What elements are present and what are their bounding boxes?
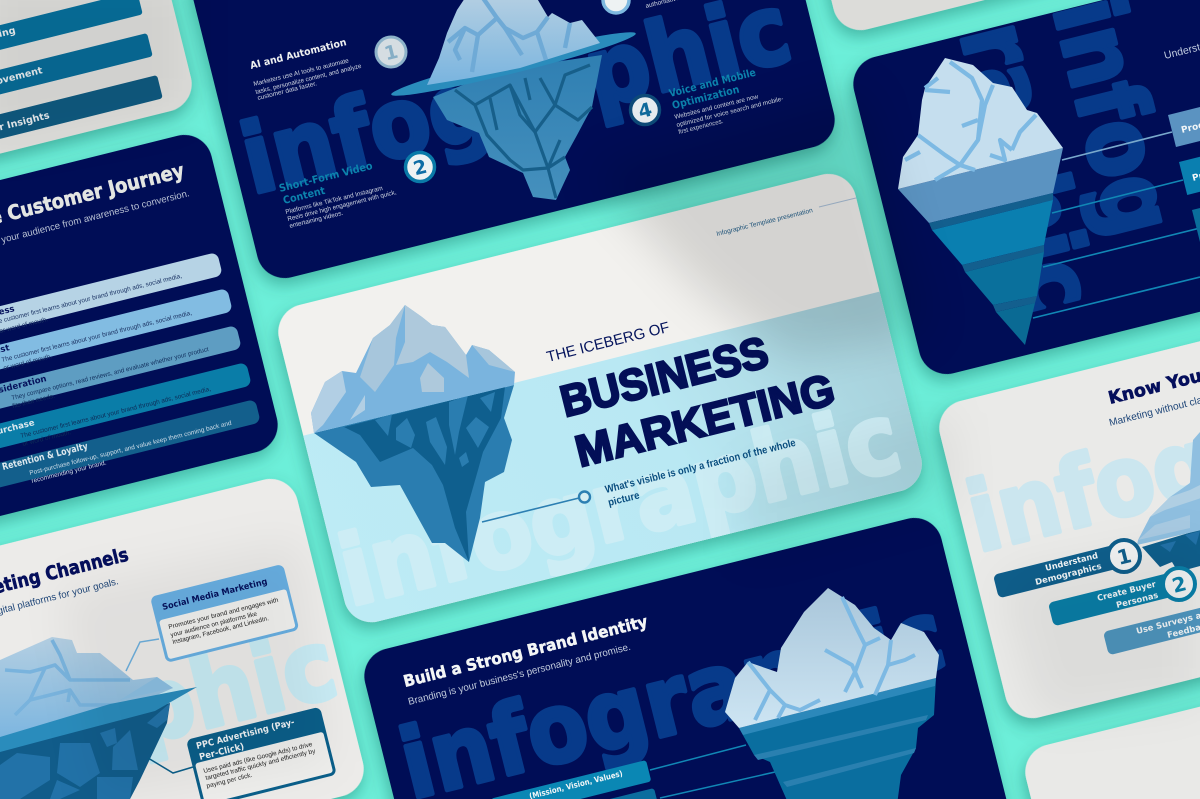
iceberg illustration xyxy=(725,588,939,799)
step pill: understand demographics: Understand xyxy=(1044,550,1099,573)
number badge 3 xyxy=(603,0,629,13)
panel: central title slide xyxy=(250,168,950,650)
panel: blank slide bottom right xyxy=(1019,608,1200,799)
journey bars xyxy=(0,254,260,488)
tagline xyxy=(604,437,797,509)
iceberg visible tip xyxy=(311,305,515,433)
callout: social media marketing: Social Media Marketing xyxy=(161,577,269,613)
item: voice and mobile optimization: Voice and Mobile xyxy=(668,67,757,100)
number badge 1 xyxy=(376,37,406,67)
number badge 2: 2 xyxy=(411,156,429,180)
iceberg illustration xyxy=(311,305,515,562)
item: AI and automation: Marketers use AI tools to automate xyxy=(253,57,350,88)
iceberg illustration xyxy=(0,637,197,799)
panel: know your audience slide xyxy=(933,264,1200,724)
step pill: create buyer personas: Create Buyer xyxy=(1096,579,1158,603)
number badge 4: 4 xyxy=(636,99,654,123)
item: voice and mobile optimization: Optimization xyxy=(671,84,741,112)
journey text: interest: The customer first learns about your brand through ads, social media, xyxy=(1,310,193,364)
item: short-form video xyxy=(278,160,397,230)
panel: customer journey slide xyxy=(0,134,284,531)
journey text: retention and loyalty: Post-purchase follow-up, support, and value keep them coming back and xyxy=(29,420,233,477)
label bar: second xyxy=(499,788,659,799)
item: voice and mobile optimization: first experiences. xyxy=(678,118,724,136)
callout: social media marketing xyxy=(126,564,299,671)
journey text: consideration: They compare options, read reviews, and evaluate whether your product xyxy=(11,346,210,402)
item: voice and mobile optimization: Websites and content are now xyxy=(674,93,759,121)
callout: social media marketing: Promotes your brand and engages with xyxy=(168,597,280,631)
callout: social media marketing: your audience on platforms like xyxy=(170,611,258,639)
heading: build a strong brand identity: Build a Strong Brand Identity xyxy=(401,612,650,691)
step pill: understand demographics: Demographics xyxy=(1034,561,1102,587)
number badge 2 xyxy=(406,152,434,182)
watermark: infographic: infographic xyxy=(328,381,911,628)
subtitle: the iceberg of: THE ICEBERG OF xyxy=(545,319,671,366)
item: AI and automation xyxy=(249,37,363,102)
iceberg underwater mass xyxy=(314,385,514,562)
step pill: create buyer personas: 2 xyxy=(1169,571,1189,598)
callout: social media marketing: Instagram, Facebook, and LinkedIn. xyxy=(172,615,270,646)
small caption: infographic template presentation xyxy=(716,197,860,238)
pointer line with dot xyxy=(482,492,590,522)
journey text: consideration: fits their needs. xyxy=(12,393,56,410)
item: short-form video: Short-Form Video xyxy=(278,160,374,195)
title: business marketing: MARKETING xyxy=(571,365,840,477)
panel: marketing channels slide xyxy=(0,473,370,799)
iceberg illustration xyxy=(389,0,638,200)
panel: digital trends slide top centre xyxy=(185,0,841,284)
label box: place xyxy=(1192,191,1200,242)
connector lines xyxy=(1033,132,1200,318)
layered iceberg xyxy=(898,58,1063,345)
item: voice and mobile optimization: optimized for voice search and mobile- xyxy=(676,96,784,129)
panel: brand identity slide xyxy=(358,512,1014,799)
small caption: infographic template presentation: Infographic Template presentation xyxy=(716,207,814,238)
callout: ppc advertising: paying per click. xyxy=(206,772,253,790)
callout: ppc advertising: PPC Advertising (Pay- xyxy=(195,718,296,752)
connector lines xyxy=(650,745,775,798)
panel: grey slide top right xyxy=(761,0,1200,36)
step pill: understand demographics xyxy=(993,540,1140,598)
item: AI and automation: AI and Automation xyxy=(249,37,348,72)
item: short-form video: Content xyxy=(282,185,326,207)
callout: ppc advertising xyxy=(148,707,337,799)
journey text: purchase: or word of mouth. xyxy=(22,429,72,448)
watermark: vertical infographic xyxy=(938,0,1197,322)
label box: product xyxy=(1168,96,1200,147)
water background xyxy=(304,292,922,622)
tagline: picture xyxy=(607,489,641,509)
step pill: create buyer personas: Personas xyxy=(1115,590,1159,610)
item: short-form video: Platforms like TikTok and Instagram xyxy=(285,185,384,216)
iceberg illustration xyxy=(1137,430,1200,572)
tagline: What's visible is only a fraction of the whole xyxy=(604,437,797,496)
title: business marketing: BUSINESS xyxy=(556,328,773,427)
number badge 1: 1 xyxy=(382,41,400,65)
panel: understand slide right xyxy=(847,0,1200,380)
step pill: understand demographics: 1 xyxy=(1114,543,1134,570)
item: AI and automation: tasks, personalize content, and analyze xyxy=(255,63,363,96)
label bar: mission, vision, values xyxy=(491,760,651,799)
item: AI and automation: customer data faster. xyxy=(257,80,318,102)
step pill: use surveys and feedback xyxy=(1103,601,1200,655)
label box: price xyxy=(1179,143,1200,195)
item: voice and mobile optimization xyxy=(668,67,784,136)
panel: list slide top left xyxy=(0,0,198,168)
callout: ppc advertising: targeted traffic quickly and efficiently by xyxy=(205,748,317,782)
item: short-form video: Reels drive high engagement with quick, xyxy=(287,189,397,223)
journey text: interest: or word of mouth. xyxy=(3,353,53,372)
number badge 4 xyxy=(630,96,660,124)
step pill: create buyer personas xyxy=(1048,568,1195,626)
callout: ppc advertising: Uses paid ads (like Google Ads) to drive xyxy=(203,741,314,775)
subtitle: Branding is your business's personality and promise. xyxy=(407,642,632,708)
journey text: retention and loyalty: recommending your brand. xyxy=(31,459,107,485)
watermark: vertical infographic: raphic xyxy=(938,11,1117,322)
callout: ppc advertising: Per-Click) xyxy=(198,742,245,763)
title: business marketing xyxy=(559,337,835,468)
journey text: retention and loyalty: Retention & Loyalty xyxy=(1,441,90,473)
journey text: awareness: or word of mouth. xyxy=(0,316,49,335)
journey text: purchase: The customer first learns about your brand through ads, social media, xyxy=(20,386,212,440)
item: short-form video: entertaining videos. xyxy=(289,210,344,230)
